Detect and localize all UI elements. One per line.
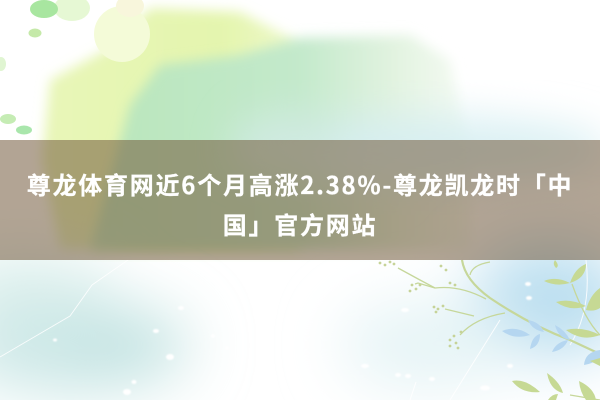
watercolor wash: mint green (90, 35, 470, 250)
leaves: green (512, 260, 600, 400)
green dots (0, 0, 144, 134)
title: 尊龙体育网近6个月高涨2.38%-尊龙凯龙时「中国」官方网站 (27, 166, 573, 241)
branch: main stems (398, 260, 600, 400)
leaves: blue (502, 320, 600, 365)
translucent title band (0, 140, 600, 260)
watercolor wash: yellow green (42, 8, 300, 250)
watercolor wash: lower blue (0, 240, 600, 395)
pale bubble (94, 6, 150, 62)
white light lines lower right (410, 260, 587, 400)
branch: seed clusters (379, 261, 462, 349)
white light trail lower left (0, 260, 128, 357)
white sparkles (53, 282, 532, 395)
watercolor wash: fading right side (230, 110, 600, 185)
